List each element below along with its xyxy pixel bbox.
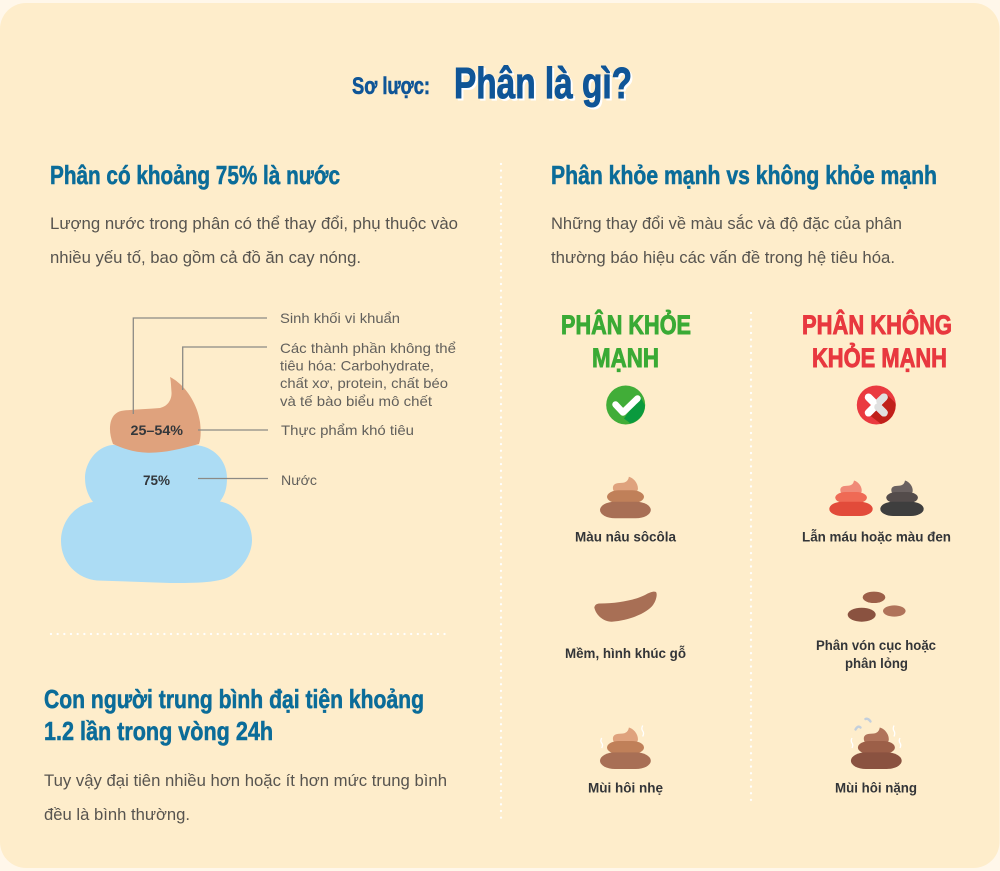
label: bacteria: Sinh khối vi khuẩn (280, 310, 400, 326)
title: Phân là gì? (454, 59, 632, 108)
label: chocolate brown: Màu nâu sôcôla (575, 530, 676, 544)
text block: water: Lượng nước trong phân có thể thay đổi, phụ thuộc vào (50, 214, 458, 233)
heading: unhealthy (802, 309, 952, 373)
title (352, 59, 632, 108)
label: mild smell: Mùi hôi nhẹ (588, 780, 663, 796)
heading: unhealthy: KHỎE MẠNH (812, 341, 947, 373)
text block: comparison (551, 214, 902, 267)
icon: log stool (594, 592, 657, 622)
panel: frequency (44, 684, 447, 824)
label: lumps: phân lỏng (845, 656, 908, 671)
label: food: Thực phẩm khó tiêu (281, 422, 414, 438)
icon: strong smell stool (851, 719, 902, 769)
icon: blood and black stools (829, 481, 924, 516)
label: indigestible (280, 340, 456, 409)
icon: chocolate brown stool (600, 477, 651, 518)
label: water: Nước (281, 472, 317, 488)
undigested layer (110, 377, 201, 453)
label: blood or black: Lẫn máu hoặc màu đen (802, 530, 951, 544)
label: lumps: Phân vón cục hoặc (816, 638, 936, 653)
heading: healthy: MẠNH (592, 343, 659, 373)
icon: lumps (848, 592, 906, 622)
text block: frequency: Tuy vậy đại tiên nhiều hơn hoặc ít hơn mức trung bình (44, 771, 447, 790)
label: lumps (816, 638, 936, 671)
panel: healthy column (561, 308, 691, 796)
label: indigestible: Các thành phần không thể (280, 340, 456, 356)
label: log: Mềm, hình khúc gỗ (565, 646, 686, 661)
icon: mild smell stool (600, 726, 651, 769)
label: indigestible: tiêu hóa: Carbohydrate, (280, 358, 434, 374)
heading: frequency: 1.2 lần trong vòng 24h (44, 716, 273, 746)
heading: frequency: Con người trung bình đại tiện khoảng (44, 684, 424, 714)
heading: healthy: PHÂN KHỎE (561, 308, 691, 340)
title: Sơ lược: (352, 73, 430, 100)
heading: unhealthy: PHÂN KHÔNG (802, 309, 952, 340)
icon: cross (857, 386, 896, 424)
icon: check (606, 386, 645, 424)
heading: healthy (561, 308, 691, 373)
label: indigestible: và tế bào biểu mô chết (280, 393, 432, 409)
panel: unhealthy column (802, 309, 952, 796)
text block: comparison: Những thay đổi về màu sắc và độ đặc của phân (551, 214, 902, 233)
text block: frequency: đều là bình thường. (44, 805, 190, 824)
label: strong smell: Mùi hôi nặng (835, 780, 917, 796)
value: 25-54%: 25–54% (130, 423, 183, 438)
text block: water: nhiều yếu tố, bao gồm cả đồ ăn cay nóng. (50, 248, 361, 267)
text block: water (50, 214, 458, 267)
text block: comparison: thường báo hiệu các vấn đề trong hệ tiêu hóa. (551, 248, 895, 267)
label: indigestible: chất xơ, protein, chất béo (280, 375, 448, 391)
panel: water content (50, 160, 458, 583)
water layer (61, 445, 252, 583)
chart: stool composition (61, 310, 456, 583)
heading: frequency (44, 684, 424, 746)
panel: healthy vs unhealthy intro (551, 160, 937, 267)
text block: frequency (44, 771, 447, 824)
value: 75%: 75% (143, 473, 170, 488)
heading: water: Phân có khoảng 75% là nước (50, 160, 340, 190)
